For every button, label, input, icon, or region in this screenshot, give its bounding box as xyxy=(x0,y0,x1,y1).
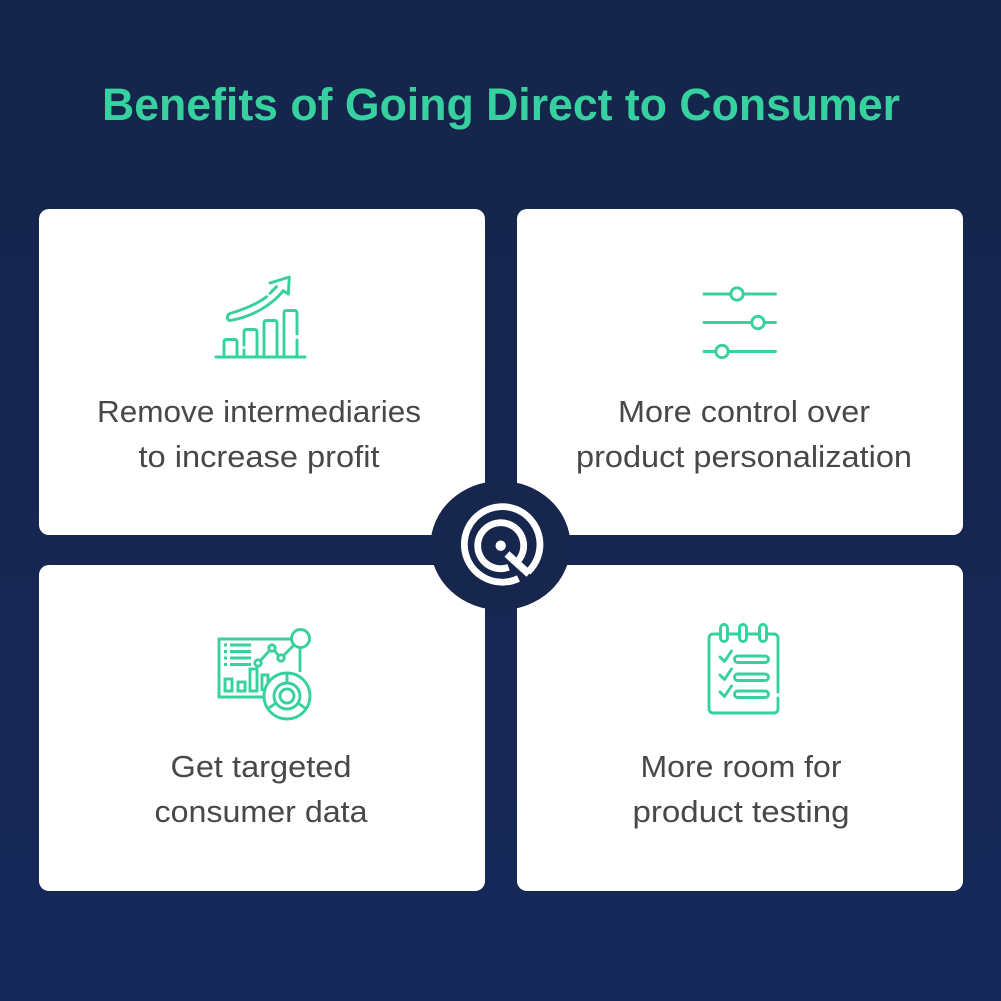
text: product testing: More room for xyxy=(640,749,842,784)
text: product testing xyxy=(632,749,850,829)
text: product personalization: More control over xyxy=(618,394,870,429)
panel: consumer data xyxy=(39,565,485,891)
icon: checklist notepad xyxy=(709,624,778,713)
text: consumer data: Get targeted xyxy=(170,749,352,784)
icon: Q logo xyxy=(464,507,540,582)
icon: rising bar chart xyxy=(216,277,305,357)
panel: product personalization xyxy=(517,209,963,535)
text: product personalization xyxy=(576,394,912,474)
text: remove intermediaries xyxy=(97,394,421,474)
icon: sliders xyxy=(704,288,776,358)
title: Benefits of Going Direct to Consumer xyxy=(102,79,900,130)
logo badge xyxy=(430,481,570,610)
text: product testing: product testing xyxy=(632,794,850,829)
text: remove intermediaries: to increase profit xyxy=(138,439,380,474)
text: consumer data: consumer data xyxy=(154,794,368,829)
panel: remove intermediaries xyxy=(39,209,485,535)
text: consumer data xyxy=(154,749,368,829)
text: product personalization: product personalization xyxy=(576,439,912,474)
panel: product testing xyxy=(517,565,963,891)
icon: data dashboard xyxy=(219,630,310,719)
text: remove intermediaries: Remove intermediaries xyxy=(97,394,421,429)
